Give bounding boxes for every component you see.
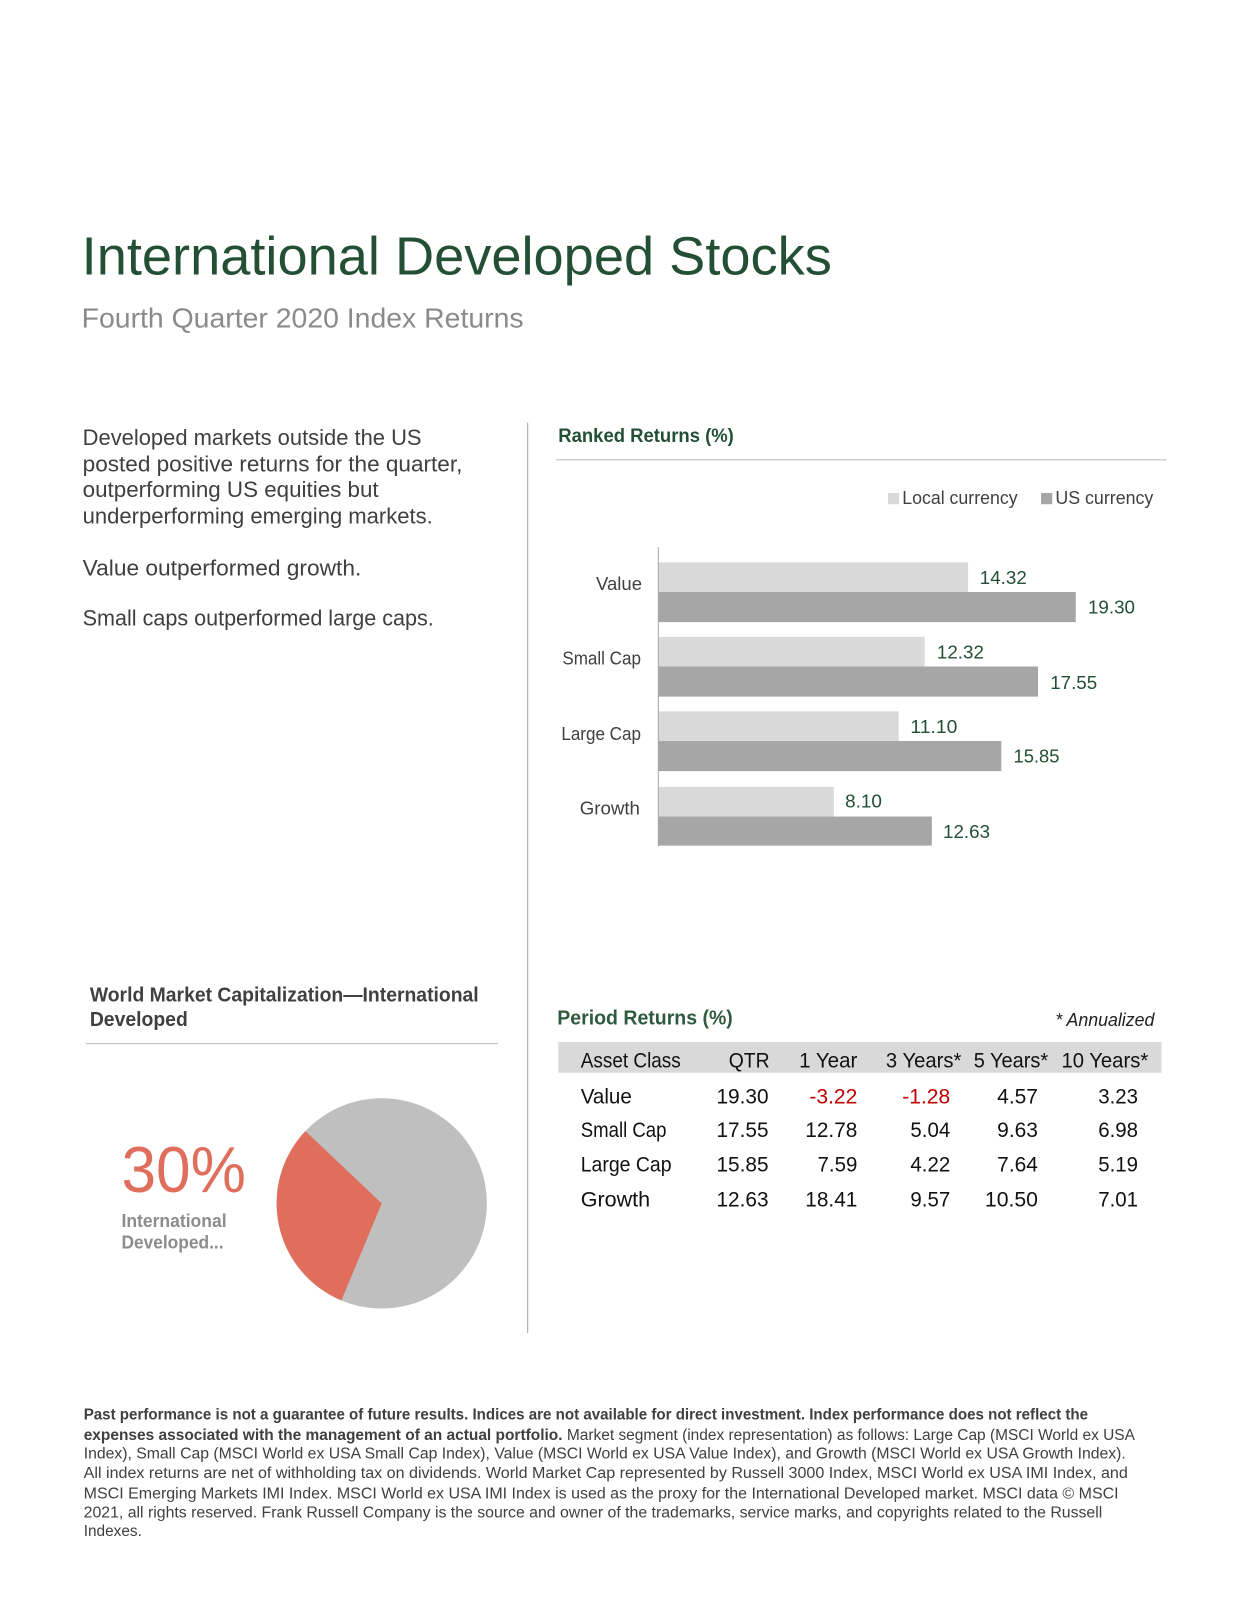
pie label: International: [121, 1210, 227, 1231]
returns table: 7.64: [997, 1153, 1038, 1177]
returns table: QTR: [729, 1049, 770, 1073]
returns table: 12.63: [716, 1187, 769, 1211]
footnote: MSCI Emerging Markets IMI Index. MSCI World ex USA IMI Index is used as the proxy for the International Developed market. MSCI data © MSCI: [84, 1485, 1119, 1502]
summary text: underperforming emerging markets.: [83, 504, 433, 529]
returns table: 9.63: [997, 1118, 1038, 1142]
footnote: Indexes.: [84, 1523, 142, 1540]
annualized note: * Annualized: [1055, 1009, 1155, 1030]
returns table: 18.41: [805, 1187, 857, 1211]
footnote: Past performance is not a guarantee of future results. Indices are not available for direct investment. Index performance does not reflect the: [84, 1407, 1088, 1424]
title: International Developed Stocks: [82, 227, 832, 287]
period returns heading: Period Returns (%): [557, 1008, 733, 1030]
returns table: Value: [581, 1084, 632, 1108]
bar chart: Value: [596, 573, 642, 594]
returns table: Growth: [581, 1187, 650, 1211]
pie chart: [277, 1098, 487, 1308]
bar chart: Growth: [580, 797, 640, 818]
summary text: Value outperformed growth.: [83, 556, 361, 581]
returns table: 5.19: [1098, 1153, 1138, 1177]
summary text: posted positive returns for the quarter,: [83, 452, 462, 477]
footnote: [84, 1407, 1135, 1540]
footnote: All index returns are net of withholding tax on dividends. World Market Cap represented by Russell 3000 Index, MSCI World ex USA IMI Index, and: [84, 1465, 1128, 1482]
chart legend: Local currency: [902, 487, 1018, 508]
returns table: 12.78: [805, 1118, 857, 1142]
bar chart: 14.32: [980, 567, 1027, 588]
panel: period returns: [557, 1008, 1161, 1211]
bar chart: 12.32: [937, 641, 984, 662]
bar chart: 19.30: [1088, 596, 1135, 617]
bar chart: [561, 547, 1135, 846]
bar chart: Small Cap: [562, 647, 641, 668]
returns table: 3 Years*: [886, 1049, 961, 1073]
pie label: Developed...: [121, 1231, 224, 1252]
returns table: 3.23: [1098, 1084, 1138, 1108]
returns table: 10 Years*: [1061, 1049, 1148, 1073]
pie label: [121, 1210, 227, 1252]
bar chart: 11.10: [910, 716, 957, 737]
panel: world market capitalization: [86, 984, 498, 1308]
returns table: 15.85: [716, 1153, 769, 1177]
returns table: 9.57: [910, 1187, 950, 1211]
returns table: 5.04: [910, 1118, 950, 1142]
summary text: Small caps outperformed large caps.: [83, 606, 434, 631]
returns table: 4.57: [997, 1084, 1038, 1108]
summary text: [83, 425, 462, 631]
bar chart: 17.55: [1050, 672, 1097, 693]
returns table: Small Cap: [581, 1118, 667, 1142]
bar chart: 15.85: [1013, 745, 1059, 766]
returns table: 6.98: [1098, 1118, 1138, 1142]
ranked returns heading: Ranked Returns (%): [558, 425, 734, 447]
returns table: -1.28: [902, 1084, 950, 1108]
returns table: [558, 1042, 1161, 1211]
returns table: 19.30: [716, 1084, 769, 1108]
returns table: 17.55: [716, 1118, 769, 1142]
pie percentage label: 30%: [121, 1133, 246, 1206]
subtitle: Fourth Quarter 2020 Index Returns: [82, 303, 524, 334]
market cap heading: [90, 984, 479, 1031]
returns table: 1 Year: [799, 1049, 857, 1073]
footnote: expenses associated with the management of an actual portfolio. Market segment (index representation) as follows: Large Cap (MSCI World ex USA: [84, 1427, 1135, 1444]
returns table: -3.22: [809, 1084, 857, 1108]
footnote: Index), Small Cap (MSCI World ex USA Small Cap Index), Value (MSCI World ex USA Value Index), and Growth (MSCI World ex USA Growth Index).: [84, 1446, 1126, 1463]
returns table: 4.22: [910, 1153, 950, 1177]
summary text: outperforming US equities but: [83, 477, 379, 502]
bar chart: Large Cap: [561, 723, 641, 744]
chart legend: US currency: [1055, 487, 1154, 508]
returns table: 7.01: [1098, 1187, 1138, 1211]
returns table: Large Cap: [581, 1153, 672, 1177]
returns table: 7.59: [818, 1153, 857, 1177]
footnote: 2021, all rights reserved. Frank Russell Company is the source and owner of the trademarks, service marks, and copyrights related to the Russell: [84, 1505, 1102, 1522]
chart legend: [888, 487, 1154, 508]
summary text: Developed markets outside the US: [83, 425, 422, 450]
bar chart: 8.10: [845, 790, 882, 811]
market cap heading: Developed: [90, 1009, 188, 1031]
market cap heading: World Market Capitalization—International: [90, 984, 479, 1006]
bar chart: 12.63: [943, 821, 990, 842]
returns table: Asset Class: [581, 1049, 681, 1073]
returns table: 5 Years*: [974, 1049, 1048, 1073]
returns table: 10.50: [985, 1187, 1038, 1211]
panel: ranked returns: [556, 425, 1167, 846]
